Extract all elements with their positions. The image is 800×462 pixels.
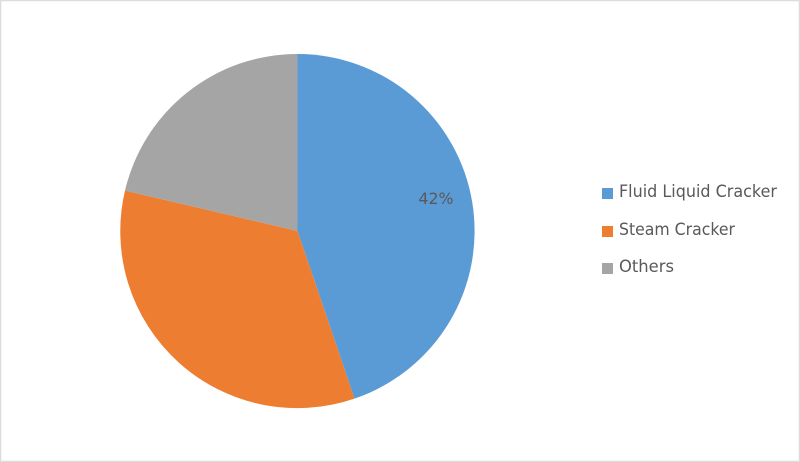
legend item: Others: Others (619, 257, 674, 277)
slice: Steam Cracker (120, 190, 354, 408)
legend item: Fluid Liquid Cracker: Fluid Liquid Cracker (619, 182, 777, 202)
legend item: Steam Cracker: Steam Cracker (619, 220, 735, 240)
data label: 42%: 42% (418, 189, 454, 208)
pie chart (120, 54, 475, 408)
slice: Others (125, 54, 298, 231)
slice: Fluid Liquid Cracker (298, 54, 475, 399)
legend (602, 182, 777, 277)
